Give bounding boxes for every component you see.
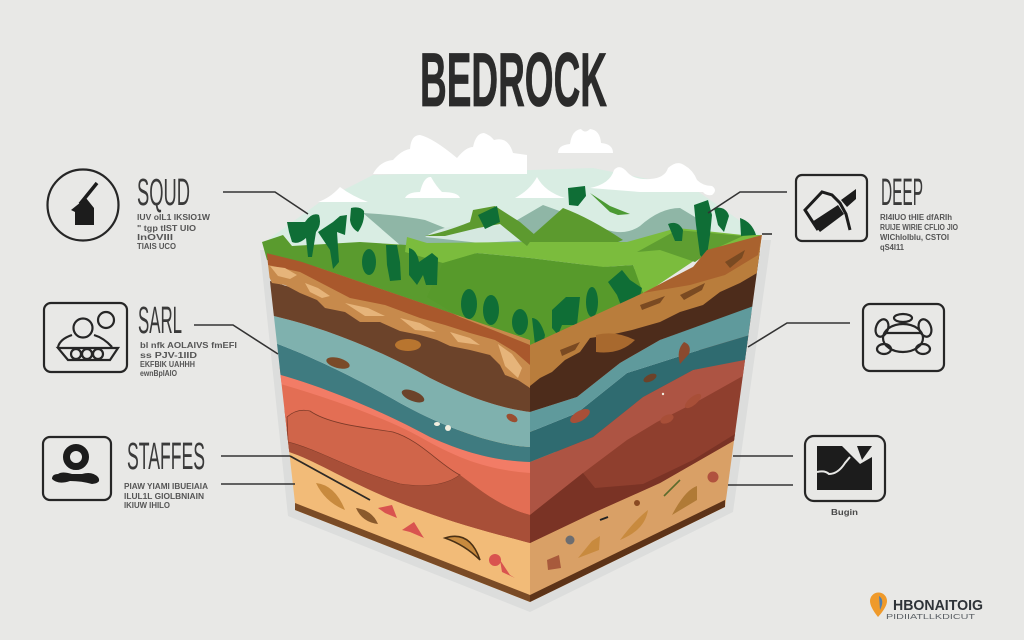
sky: [262, 168, 762, 262]
panel: SARL: SARL: [138, 300, 182, 342]
crust dark flecks: [560, 250, 745, 356]
illustration: sky and clouds: [262, 129, 762, 262]
panel: SARL: [44, 300, 237, 378]
topsoil: [260, 278, 530, 412]
dark band below lens: [287, 442, 530, 543]
panel: SQUD: SQUD: [137, 172, 190, 214]
base strip: [530, 500, 725, 604]
body text: [124, 482, 208, 510]
medium green hill: [527, 208, 623, 252]
distant hills: [363, 205, 700, 245]
lake: [425, 224, 530, 243]
body text: RUIJE WIRIE CFLIO JIO: [880, 223, 958, 232]
body text: EKFBIK UAHHH: [140, 360, 195, 369]
body text: IKIUW IHILO: [124, 501, 170, 510]
icon: map pin: [870, 592, 887, 617]
crust tan edge: [530, 235, 762, 386]
dark red rock: [284, 409, 530, 543]
illustration: left face of strata: [260, 252, 540, 610]
light teal layer: [260, 313, 530, 447]
illustration: trees: [287, 186, 756, 346]
upper red band: [530, 357, 750, 515]
body text: [880, 213, 958, 252]
fossils: [316, 483, 345, 510]
body text: ewnBpIAIO: [140, 369, 177, 378]
logo: [870, 592, 983, 621]
body text: lnOVIII: [137, 233, 173, 242]
icon: rocks in a tray: [44, 303, 127, 372]
body text: " tgp tIST UIO: [137, 224, 196, 233]
icon: hammer: [796, 175, 867, 241]
block drop shadow: [260, 240, 771, 612]
text: BEDROCK: [420, 38, 607, 123]
body text: ss PJV-1IID: [140, 351, 197, 360]
body text: PIAW YIAMI IBUEIAIA: [124, 482, 208, 491]
fault line: [290, 456, 370, 500]
lens rock: [287, 410, 460, 486]
crust top: [262, 252, 530, 365]
body text: ILUL1L GIOLBNIAIN: [124, 492, 204, 501]
mid salmon rock: [280, 367, 530, 515]
crust highlights: [270, 266, 522, 378]
body text: [137, 213, 210, 251]
pebbles: [395, 339, 421, 351]
clouds: [318, 129, 715, 202]
panel: DEEP: DEEP: [881, 172, 923, 214]
right meadow patch: [637, 230, 743, 262]
body text: bl nfk AOLAIVS fmEFl: [140, 341, 237, 350]
body text: RI4IUO tHIE dfARIh: [880, 213, 952, 222]
icon: ring over bar: [43, 437, 111, 500]
fossils: [578, 536, 600, 558]
panel: right icon, chart: [805, 436, 885, 517]
central dark meadow: [427, 253, 643, 347]
tagline: PIDIIATLLKDICUT: [886, 612, 976, 621]
illustration: right face of strata: [530, 235, 770, 610]
bright salmon band: [280, 375, 530, 473]
pebbles: [596, 333, 635, 352]
illustration: landscape surface: [262, 205, 762, 352]
green ridge: [425, 206, 535, 246]
base green slope: [262, 235, 643, 352]
panel: SQUD: [48, 170, 210, 251]
leader lines: [194, 192, 850, 485]
light teal layer: [530, 303, 760, 432]
crust tan edge: [262, 262, 530, 388]
text: STAFFES: [127, 436, 205, 478]
dark teal layer: [277, 344, 530, 462]
panel: right icon, shell: [863, 304, 944, 371]
panel: DEEP: [796, 172, 958, 252]
light green field: [405, 228, 762, 295]
topsoil: [530, 250, 762, 412]
sand layer: [530, 430, 736, 602]
icon: house in circle: [48, 170, 118, 240]
sand layer: [286, 430, 530, 602]
lower dark wedge: [530, 434, 735, 543]
deep red rock: [530, 313, 752, 543]
caption: Bugin: [831, 508, 858, 517]
body text: lUV oIL1 IKSIO1W: [137, 213, 210, 222]
body text: TIAIS UCO: [137, 242, 176, 251]
base strip: [295, 503, 530, 604]
crust top: [643, 235, 762, 293]
brand name: HBONAITOIG: [893, 597, 983, 614]
body text: [140, 341, 237, 378]
dark teal layer: [530, 332, 760, 462]
panel: STAFFES: [43, 436, 208, 510]
body text: WlChIoIbIu, CSTOI: [880, 233, 949, 242]
body text: qS4I11: [880, 243, 905, 252]
